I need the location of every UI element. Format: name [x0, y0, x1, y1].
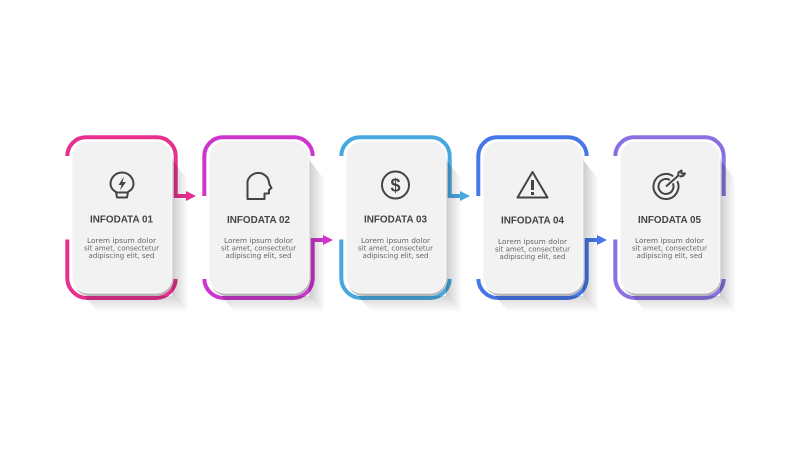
shadow 5 — [632, 160, 736, 312]
card 3 — [346, 141, 446, 293]
text 5: Lorem ipsum dolor — [635, 237, 704, 245]
text 5: adipiscing elit, sed — [636, 252, 702, 260]
text 2 — [221, 237, 296, 260]
frame bottom and arrow stem 2 — [204, 240, 324, 298]
frame bottom 1 — [67, 240, 176, 298]
icon: target with dart — [653, 170, 685, 199]
text 1 — [84, 237, 159, 260]
card 1 — [72, 141, 172, 293]
text 1: sit amet, consectetur — [84, 244, 159, 252]
text 2: sit amet, consectetur — [221, 244, 296, 252]
arrow 4 — [597, 235, 607, 245]
heading 5: INFODATA 05 — [638, 214, 701, 226]
panel: step 5 — [615, 137, 736, 312]
icon: warning triangle — [518, 172, 548, 198]
shadow 1 — [84, 160, 188, 312]
shadow 3 — [358, 160, 462, 312]
frame bottom 3 — [341, 240, 450, 298]
text 3: adipiscing elit, sed — [362, 252, 428, 260]
frame top 2 — [204, 137, 313, 196]
card 2 — [209, 141, 309, 293]
text 5 — [632, 237, 707, 260]
card 4 — [483, 141, 583, 293]
frame bottom and arrow stem 4 — [478, 240, 598, 298]
text 4: adipiscing elit, sed — [500, 253, 566, 261]
text 4: sit amet, consectetur — [495, 246, 570, 254]
text 1: adipiscing elit, sed — [88, 252, 154, 260]
icon: head silhouette — [248, 173, 272, 199]
text 2: adipiscing elit, sed — [226, 252, 292, 260]
text 3: Lorem ipsum dolor — [361, 237, 430, 245]
text 1: Lorem ipsum dolor — [87, 237, 156, 245]
panel: step 3 — [341, 137, 470, 312]
icon: dollar coin: $ — [390, 176, 401, 196]
frame top and arrow stem 1 — [67, 137, 187, 196]
heading 1: INFODATA 01 — [90, 214, 153, 226]
text 2: Lorem ipsum dolor — [224, 237, 293, 245]
text 5: sit amet, consectetur — [632, 244, 707, 252]
card edge 4 — [484, 144, 584, 296]
icon: dollar coin — [382, 172, 409, 198]
card edge 2 — [210, 144, 310, 296]
shadow 4 — [495, 160, 599, 312]
panel: step 1 — [67, 137, 196, 312]
text 4: Lorem ipsum dolor — [498, 238, 567, 246]
heading 4: INFODATA 04 — [501, 214, 564, 226]
text 3: sit amet, consectetur — [358, 244, 433, 252]
frame top 4 — [478, 137, 587, 196]
arrow 3 — [460, 191, 470, 201]
heading 2: INFODATA 02 — [227, 214, 290, 226]
card 5 — [620, 141, 720, 293]
frame top 5 — [615, 137, 724, 196]
card edge 1 — [73, 144, 173, 296]
shadow 2 — [221, 160, 325, 312]
frame top and arrow stem 3 — [341, 137, 461, 196]
panel: step 2 — [204, 137, 333, 312]
card edge 5 — [621, 144, 721, 296]
text 3 — [358, 237, 433, 260]
arrow 2 — [323, 235, 333, 245]
text 4 — [495, 238, 570, 261]
icon: light bulb — [110, 172, 134, 198]
arrow 1 — [186, 191, 196, 201]
heading 3: INFODATA 03 — [364, 214, 427, 226]
card edge 3 — [347, 144, 447, 296]
frame bottom 5 — [615, 240, 724, 298]
panel: step 4 — [478, 137, 607, 312]
